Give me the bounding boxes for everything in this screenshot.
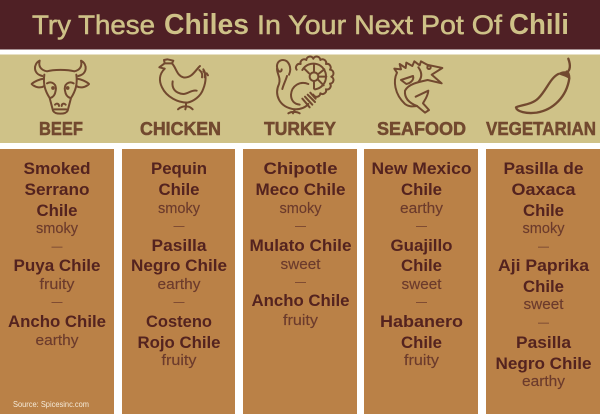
panel: chicken chiles: —: [174, 296, 184, 308]
panel: turkey chiles: Ancho Chile: [252, 291, 350, 310]
panel: turkey chiles: Meco Chile: [256, 180, 346, 199]
panel: vegetarian chiles: Chile: [523, 201, 564, 220]
title text: Chili: [509, 9, 569, 41]
title text: Chiles: [164, 9, 249, 41]
panel: chicken chiles: Rojo Chile: [138, 333, 220, 352]
panel: turkey chiles: —: [295, 220, 306, 232]
panel: vegetarian chiles: Aji Paprika: [498, 256, 590, 275]
panel: beef chiles: —: [52, 296, 62, 308]
panel: vegetarian chiles: [486, 149, 600, 414]
panel: chicken chiles: —: [174, 220, 184, 232]
panel: seafood chiles: —: [416, 220, 427, 232]
panel: protein icon band: [0, 54, 600, 143]
panel: turkey chiles: —: [295, 276, 306, 288]
panel: vegetarian chiles: smoky: [522, 221, 565, 237]
panel: chicken chiles: Negro Chile: [131, 256, 227, 275]
panel: seafood chiles: Chile: [401, 180, 442, 199]
panel: seafood chiles: Chile: [401, 333, 442, 352]
panel: beef chiles: —: [52, 241, 62, 253]
source note: Source: Spicesinc.com: [13, 399, 89, 409]
panel: vegetarian chiles: —: [538, 241, 549, 253]
icon: seafood fish: [394, 61, 442, 113]
panel: seafood chiles: Habanero: [380, 312, 463, 331]
panel: chicken chiles: Costeno: [146, 312, 212, 331]
panel: turkey chiles: smoky: [280, 201, 322, 217]
panel: turkey chiles: fruity: [283, 313, 319, 329]
title text: In Your Next Pot Of: [257, 10, 503, 40]
panel: seafood chiles: [364, 149, 478, 414]
title text: [32, 9, 569, 41]
panel: beef chiles: earthy: [36, 333, 79, 349]
panel: beef chiles: Smoked: [24, 159, 90, 178]
panel: vegetarian chiles: —: [538, 317, 549, 329]
panel: chicken chiles: smoky: [158, 201, 201, 217]
panel: seafood chiles: Guajillo: [390, 236, 452, 255]
panel: vegetarian chiles: Pasilla: [516, 333, 572, 352]
panel: seafood chiles: New Mexico: [372, 159, 472, 178]
panel: beef chiles: Serrano: [24, 180, 90, 199]
icon: turkey: [277, 57, 333, 113]
panel: beef chiles: Chile: [36, 201, 78, 220]
label: vegetarian: VEGETARIAN: [486, 119, 596, 139]
panel: vegetarian chiles: Pasilla de: [504, 159, 584, 178]
panel: chicken chiles: Pasilla: [152, 236, 207, 255]
panel: seafood chiles: earthy: [400, 201, 444, 217]
panel: chicken chiles: Chile: [158, 180, 200, 199]
icon: beef: [32, 61, 89, 114]
label: beef: BEEF: [39, 119, 83, 139]
panel: beef chiles: smoky: [36, 221, 79, 237]
panel: chicken chiles: earthy: [158, 277, 201, 293]
panel: vegetarian chiles: Negro Chile: [496, 354, 592, 373]
title banner: [0, 0, 600, 50]
panel: seafood chiles: sweet: [402, 277, 442, 293]
panel: chicken chiles: [122, 149, 235, 414]
panel: turkey chiles: sweet: [280, 257, 320, 273]
label: chicken: CHICKEN: [140, 119, 221, 139]
panel: seafood chiles: fruity: [404, 353, 440, 369]
panel: seafood chiles: Chile: [401, 256, 442, 275]
panel: vegetarian chiles: earthy: [522, 374, 566, 390]
panel: beef chiles: fruity: [40, 277, 75, 293]
panel: turkey chiles: Chipotle: [264, 159, 338, 178]
panel: turkey chiles: Mulato Chile: [250, 236, 352, 255]
icon: chicken: [159, 59, 208, 109]
title text: Try These: [32, 10, 155, 40]
label: seafood: SEAFOOD: [377, 119, 466, 139]
icon: vegetarian chile pepper: [516, 59, 570, 113]
panel: turkey chiles: [243, 149, 357, 414]
panel: beef chiles: Ancho Chile: [8, 312, 106, 331]
panel: vegetarian chiles: sweet: [524, 297, 564, 313]
panel: vegetarian chiles: Chile: [523, 277, 564, 296]
panel: chicken chiles: Pequin: [151, 159, 207, 178]
panel: seafood chiles: —: [416, 296, 427, 308]
panel: beef chiles: Puya Chile: [14, 256, 100, 275]
panel: beef chiles: [0, 149, 114, 414]
panel: chicken chiles: fruity: [162, 353, 197, 369]
label: turkey: TURKEY: [264, 119, 336, 139]
panel: vegetarian chiles: Oaxaca: [512, 180, 576, 199]
